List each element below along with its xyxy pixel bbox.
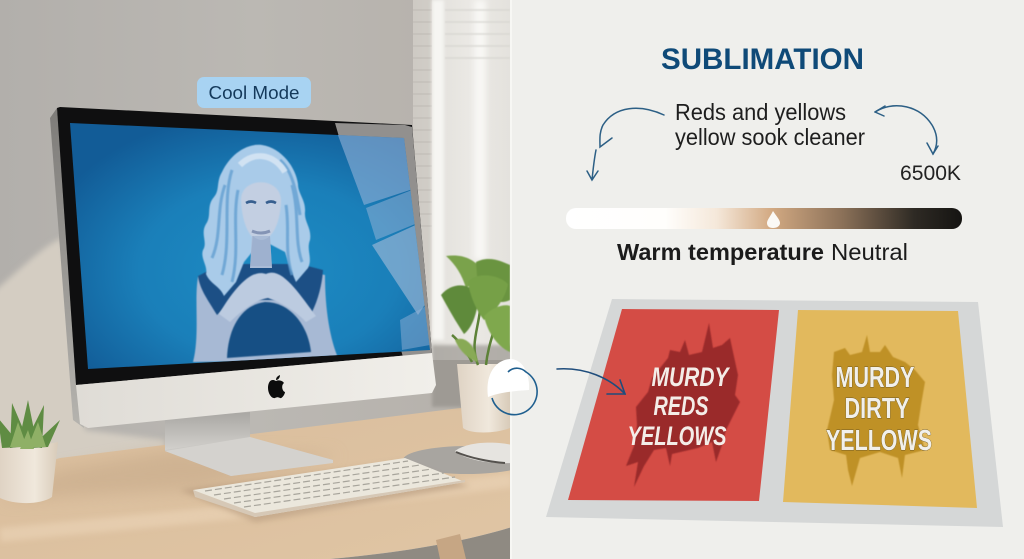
caption: yellow sook cleaner: [675, 124, 865, 150]
floor corner and leg: [330, 527, 512, 559]
arms and shoulders: [193, 270, 339, 362]
dress: [198, 264, 323, 315]
text: Murdy Dirty Yellows: YELLOWS: [826, 425, 932, 457]
temperature gradient bar: [566, 208, 962, 229]
text: Murdy Reds Yellows: [628, 362, 731, 451]
text: Murdy Reds Yellows: YELLOWS: [628, 421, 726, 451]
arrow: to red swatch: [557, 369, 625, 394]
keyboard: [193, 458, 465, 517]
monitor back edge: [50, 108, 84, 428]
bezel glass right: [335, 123, 432, 357]
arrow: left curved: [587, 108, 664, 180]
hair: [202, 145, 310, 296]
chin: [76, 353, 436, 428]
arrow: right curved: [875, 106, 938, 154]
text: Murdy Dirty Yellows: [826, 362, 932, 457]
caption: [675, 99, 865, 150]
succulent in pot: [0, 400, 60, 503]
wall shadow behind plant: [432, 345, 512, 407]
transition icon: blob and circle: [487, 359, 537, 415]
keyboard shadow: [186, 473, 466, 523]
wall sunlight patch: [0, 238, 165, 480]
badge: Cool Mode: Cool Mode: [208, 83, 300, 103]
apple logo: [268, 375, 285, 398]
swatch: yellow: [783, 310, 977, 508]
mouse pad: [404, 446, 510, 474]
face: [241, 182, 281, 241]
print sheet: [546, 299, 1003, 527]
text: Murdy Reds Yellows: MURDY: [652, 362, 731, 392]
text: Murdy Reds Yellows: REDS: [654, 391, 708, 421]
divider: [510, 0, 512, 559]
wall: [0, 0, 510, 480]
eyes and mouth: [246, 202, 276, 203]
text: Murdy Dirty Yellows: MURDY: [836, 362, 914, 394]
title: SUBLIMATION: [661, 43, 864, 76]
screen: [70, 123, 430, 369]
text: Murdy Dirty Yellows: DIRTY: [844, 393, 910, 425]
plant in pot, right: [441, 256, 510, 432]
person on screen: [193, 145, 339, 362]
monitor: [50, 107, 436, 428]
smudge: yellow: [827, 335, 925, 486]
desk: [0, 404, 512, 559]
label: 6500K: 6500K: [900, 162, 961, 185]
temperature label: neutral: Neutral: [831, 239, 908, 265]
bezel: [57, 107, 432, 385]
temperature label: Warm temperature: [617, 239, 824, 265]
window with blinds: [413, 0, 510, 360]
mouse: [455, 443, 512, 463]
panel: right background: [510, 0, 1024, 559]
hands: [219, 273, 316, 322]
badge: Cool Mode: [197, 77, 311, 108]
desk back shadow: [52, 454, 262, 495]
desk highlights: [0, 480, 512, 535]
smudge: red: [626, 323, 740, 487]
monitor stand: [165, 412, 333, 476]
swatch: red: [568, 309, 779, 501]
screen reflection: [336, 130, 430, 350]
caption: Reds and yellows: [675, 99, 846, 125]
temperature marker drop: [767, 211, 780, 228]
panel: desk photo: [0, 0, 531, 559]
